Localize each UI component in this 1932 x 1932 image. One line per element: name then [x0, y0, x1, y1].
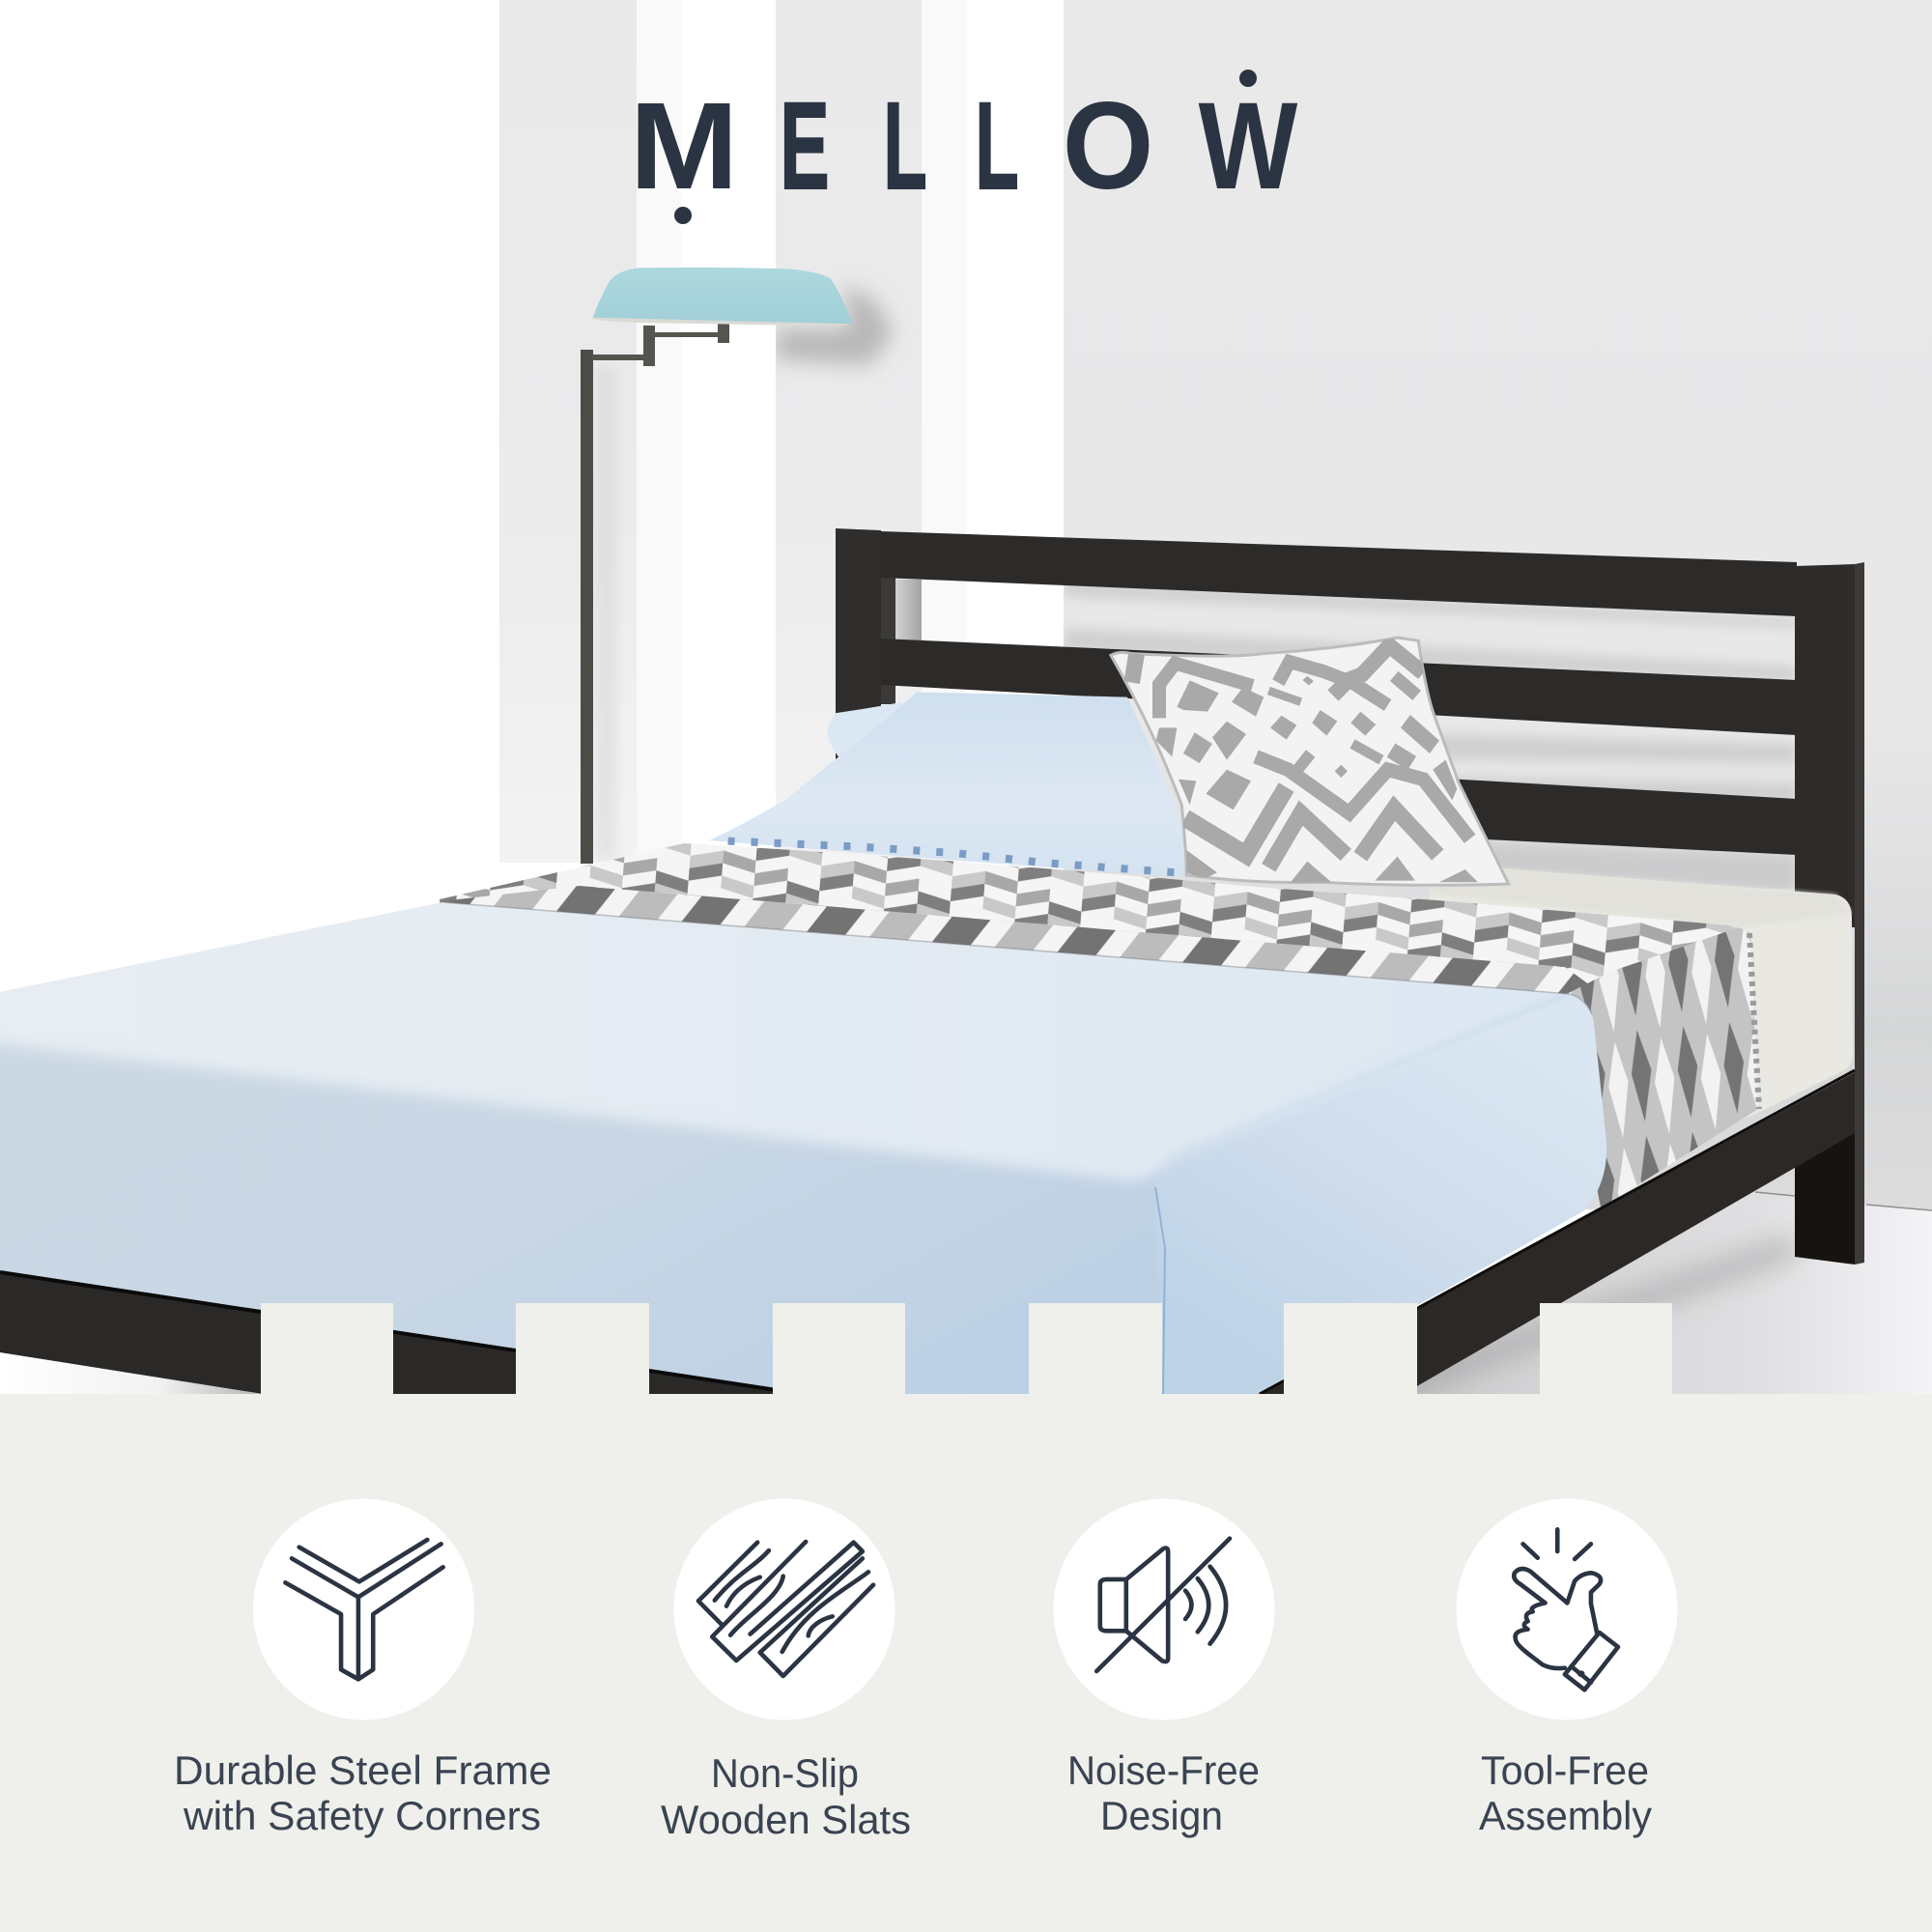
feature: durable steel frame: [174, 1499, 552, 1838]
icon: muted speaker: [1096, 1539, 1230, 1671]
icon circle: [253, 1499, 474, 1719]
top rail: [881, 531, 1797, 616]
feature: wooden slats: [661, 1499, 911, 1842]
label: Wooden Slats: [661, 1797, 911, 1842]
label: [174, 1747, 552, 1838]
bottom panel: [0, 1303, 1932, 1932]
pillow body: [709, 693, 1188, 877]
headboard: [836, 528, 1864, 1264]
logo: MELLOW: O: [1062, 77, 1153, 215]
left post: [836, 528, 881, 773]
front rail: [0, 1272, 802, 1394]
pillow hem stars: [728, 841, 1176, 872]
logo: MELLOW: L: [975, 77, 1019, 215]
patterned pillow: [1111, 638, 1509, 886]
right post front: [1795, 564, 1855, 927]
label: [1479, 1747, 1652, 1838]
icon circle: [674, 1499, 895, 1719]
blanket front band: [449, 886, 1604, 1034]
label: Tool-Free: [1481, 1747, 1649, 1793]
blanket stitched edge: [1749, 933, 1759, 1109]
label: Noise-Free: [1067, 1747, 1260, 1793]
logo: MELLOW: L: [883, 77, 927, 215]
pale blue pillow: [709, 693, 1188, 877]
blue fitted sheet: [0, 902, 1607, 1394]
logo: MELLOW: [629, 70, 1298, 224]
icon: steel corner: [285, 1540, 443, 1679]
icon: finger snap: [1514, 1529, 1618, 1690]
wall shading between rails: [895, 580, 922, 641]
logo: MELLOW: E: [780, 77, 830, 215]
floor lamp: [581, 268, 894, 864]
logo: MELLOW: M: [629, 77, 738, 215]
lower rail: [1430, 778, 1797, 855]
wall background stripes: [0, 0, 1932, 1394]
lamp shade: [593, 268, 852, 327]
right post side: [1855, 562, 1864, 1264]
bed frame rails: [0, 1070, 1855, 1394]
lamp shade shadow: [776, 285, 894, 365]
sheet top surface: [0, 902, 1569, 1184]
feature: tool-free: [1457, 1499, 1677, 1838]
label: Assembly: [1479, 1793, 1652, 1838]
right side rail: [1260, 1072, 1855, 1394]
pillow ear: [828, 702, 903, 757]
icon circle: [1457, 1499, 1677, 1719]
mattress: [1430, 868, 1853, 1159]
lamp arms: [592, 316, 729, 366]
sheet corner seam: [1155, 1187, 1165, 1394]
icon circle: [1053, 1499, 1275, 1719]
lamp pole shadow: [595, 367, 616, 860]
middle rail: [881, 639, 1797, 735]
feature: noise-free: [1053, 1499, 1275, 1838]
floor: [0, 1192, 1932, 1394]
lamp pole: [581, 350, 593, 864]
sheet right face: [1178, 995, 1607, 1393]
blanket side drape: [1546, 927, 1758, 1208]
sheet front face: [0, 902, 1606, 1394]
label: Non-Slip: [711, 1750, 859, 1796]
label: [661, 1750, 911, 1842]
logo: MELLOW: W: [1199, 77, 1297, 215]
scalloped tabs: [261, 1303, 1672, 1395]
blanket top surface: [440, 843, 1750, 1063]
label: Durable Steel Frame: [174, 1747, 552, 1793]
chevron blanket: [440, 843, 1759, 1208]
label: [1067, 1747, 1260, 1838]
icon: wooden slats: [698, 1542, 873, 1676]
post inner side: [881, 578, 895, 704]
bed leg: [1795, 1111, 1855, 1264]
label: Design: [1100, 1793, 1223, 1838]
label: with Safety Corners: [183, 1793, 541, 1838]
